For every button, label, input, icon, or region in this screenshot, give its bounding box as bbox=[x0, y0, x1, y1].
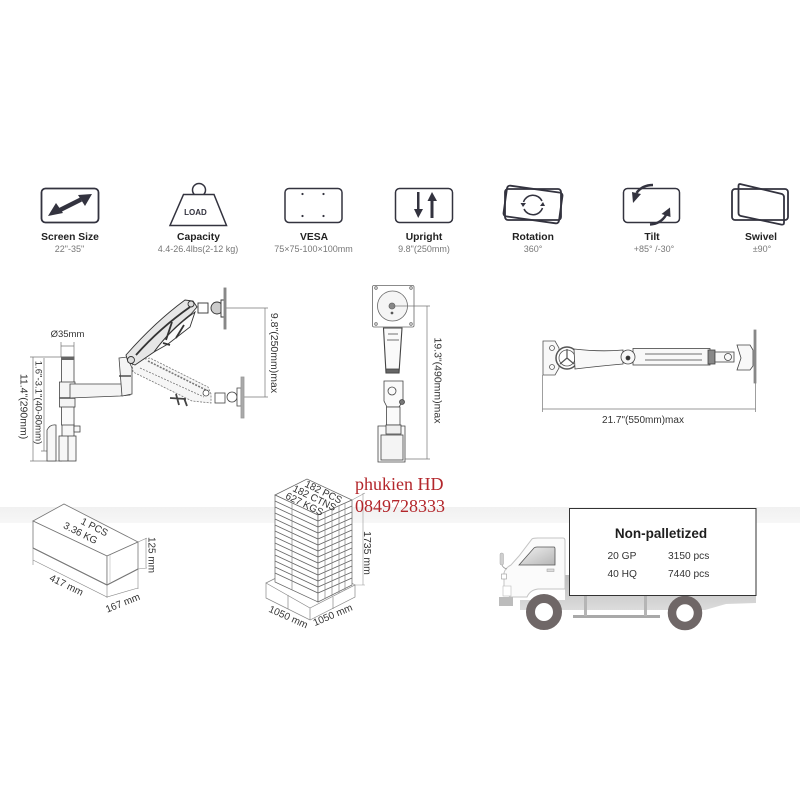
carton drawing bbox=[33, 504, 138, 585]
label: height 11.4 inch: 11.4"(290mm) bbox=[18, 374, 30, 439]
icon group: Swivel bbox=[732, 184, 788, 254]
label: Capacity: Capacity bbox=[177, 232, 220, 243]
cargo title: Non-palletized bbox=[615, 526, 707, 541]
icon: swiveled screens bbox=[732, 184, 788, 225]
label: carton width: 167 mm bbox=[104, 592, 142, 616]
icon: diagonal double arrow in screen bbox=[42, 188, 98, 222]
lower arm hardware bbox=[170, 377, 244, 418]
VESA plate bbox=[372, 286, 414, 327]
icon group: Rotation bbox=[503, 185, 563, 254]
value: VESA sizes: 75×75-100×100mm bbox=[274, 244, 353, 254]
label: weight: 627 KGS bbox=[283, 491, 325, 519]
value: rotation angle: 360° bbox=[524, 244, 543, 254]
value: screen range: 22"-35" bbox=[55, 244, 84, 254]
icon: tilt arrows in screen bbox=[624, 185, 680, 224]
icon group: Tilt bbox=[624, 185, 680, 254]
diagram: side view of monitor arm bbox=[18, 288, 280, 461]
diagram: top view of monitor arm bbox=[542, 330, 756, 426]
label: carton top: 1 PCS bbox=[79, 516, 110, 539]
arm body bbox=[378, 328, 405, 462]
icon: VESA hole pattern bbox=[285, 188, 342, 222]
clamp base bbox=[47, 424, 80, 461]
lower dashed arm position bbox=[132, 358, 211, 403]
label: carton length: 417 mm bbox=[47, 573, 85, 599]
label: total height: 19.3"(490mm)max bbox=[432, 337, 444, 424]
value: capacity range: 4.4-26.4lbs(2-12 kg) bbox=[158, 244, 238, 254]
row: 20 GP: 3150 pcs bbox=[668, 551, 709, 562]
label: stack height: 1735 mm bbox=[361, 531, 373, 575]
upper gas-spring arm bbox=[126, 288, 226, 365]
icon: up and down arrows bbox=[396, 188, 452, 222]
icon group: Upright bbox=[396, 188, 452, 254]
label: pole diameter: Ø35mm bbox=[51, 329, 84, 340]
label: Swivel: Swivel bbox=[745, 232, 777, 243]
value: swivel angle: ±90° bbox=[753, 244, 772, 254]
extended arm bbox=[574, 330, 756, 383]
row: 40 HQ: 40 HQ bbox=[608, 569, 637, 580]
dimension lines: carton bbox=[33, 538, 147, 598]
dimension lines: pallet bbox=[352, 493, 365, 585]
carton stack bbox=[275, 479, 352, 602]
pole bbox=[62, 357, 74, 425]
label: Upright: Upright bbox=[406, 232, 443, 243]
icon: load weight: LOAD bbox=[184, 208, 207, 217]
front wheel bbox=[530, 598, 558, 626]
row: 20 GP bbox=[608, 551, 709, 562]
dimension lines: side view bbox=[30, 308, 268, 461]
label: clamp range: 1.6"-3.1"(40-80mm) bbox=[32, 361, 44, 444]
icon group: Screen Size bbox=[41, 188, 99, 254]
row: 20 GP: 20 GP bbox=[608, 551, 637, 562]
label: pallet length: 1050 mm bbox=[267, 604, 309, 631]
label: Screen Size: Screen Size bbox=[41, 232, 99, 243]
dimension lines: top view bbox=[542, 375, 756, 412]
label: Tilt: Tilt bbox=[644, 232, 660, 243]
watermark: shop name and phone: phukien HD bbox=[355, 474, 444, 494]
label: carton height: 125 mm bbox=[146, 537, 156, 573]
cargo panel bbox=[570, 508, 756, 596]
icon group: VESA bbox=[274, 188, 353, 254]
diagram: single carton bbox=[33, 504, 156, 616]
truck cab bbox=[499, 538, 565, 606]
dimension lines: front view bbox=[393, 306, 430, 459]
label: pieces: 182 PCS bbox=[303, 479, 344, 507]
watermark: shop name and phone: 0849728333 bbox=[355, 496, 445, 516]
label: VESA: VESA bbox=[300, 232, 329, 243]
diagram: front view of monitor arm bbox=[372, 286, 444, 462]
value: tilt range: +85° /-30° bbox=[634, 244, 675, 254]
row: 40 HQ bbox=[608, 569, 709, 580]
pallet base bbox=[266, 578, 355, 620]
value: upright travel: 9.8"(250mm) bbox=[398, 244, 450, 254]
label: cartons: 182 CTNS bbox=[291, 484, 338, 514]
wall and pole mount bbox=[543, 341, 578, 375]
label: carton weight: 3.36 KG bbox=[61, 521, 99, 547]
lower arm bbox=[60, 357, 132, 407]
icon group: Capacity bbox=[158, 184, 238, 254]
watermark: shop name and phone bbox=[355, 474, 445, 516]
label: pallet width: 1050 mm bbox=[312, 602, 354, 629]
label: extension: 21.7"(550mm)max bbox=[602, 415, 684, 426]
row: 40 HQ: 7440 pcs bbox=[668, 569, 709, 580]
diagram: delivery truck bbox=[499, 508, 756, 626]
label: Rotation: Rotation bbox=[512, 232, 554, 243]
label: vertical reach: 9.8"(250mm)max bbox=[268, 313, 280, 394]
rear wheel bbox=[672, 600, 698, 626]
icon: rotated screens with circular arrows bbox=[503, 185, 563, 224]
truck chassis bbox=[520, 575, 756, 618]
diagram: pallet stack bbox=[266, 479, 373, 631]
